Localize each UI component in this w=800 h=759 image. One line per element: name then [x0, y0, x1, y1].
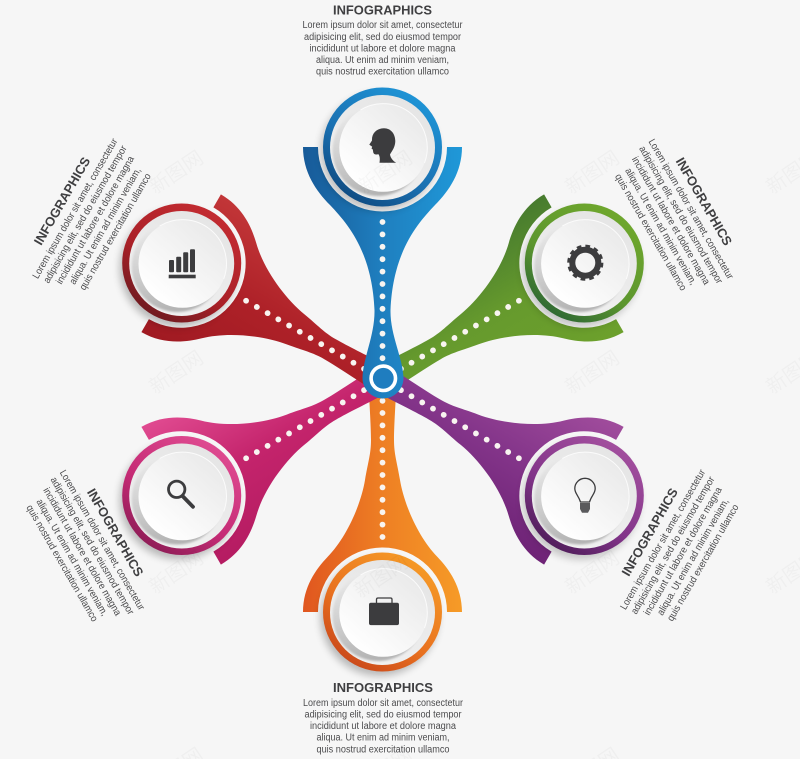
purple petal — [342, 310, 644, 565]
blue petal — [303, 88, 462, 398]
text block: bottom: adipisicing elit, sed do eiusmod tempor — [304, 710, 462, 721]
text block: bottom — [303, 680, 464, 755]
watermark stamps: 新图网 — [561, 146, 624, 199]
text block: red: aliqua. Ut enim ad minim veniam, — [68, 166, 144, 287]
red arm — [141, 194, 423, 449]
icon: briefcase — [369, 598, 399, 625]
icon: gear — [569, 246, 602, 279]
text block: purple: incididunt ut labore et dolore magna — [642, 485, 725, 617]
text block: red: incididunt ut labore et dolore magna — [54, 154, 137, 286]
text block: purple: INFOGRAPHICS — [618, 485, 681, 579]
text block: bottom: quis nostrud exercitation ullamco — [316, 744, 450, 755]
red arm dots — [242, 297, 368, 373]
watermark stamps: 新图网 — [561, 546, 624, 599]
blue ring — [320, 88, 442, 211]
orange ring — [320, 552, 442, 676]
watermark stamps: 新图网 — [145, 346, 208, 399]
green arm — [342, 194, 624, 449]
pink ring — [120, 436, 241, 560]
text block: pink: aliqua. Ut enim ad minim veniam, — [34, 497, 110, 618]
green arm dots — [397, 297, 523, 373]
text block: top: incididunt ut labore et dolore magna — [310, 43, 456, 54]
text block: purple: aliqua. Ut enim ad minim veniam, — [655, 497, 731, 618]
text block: bottom: INFOGRAPHICS — [333, 680, 433, 695]
red ring — [120, 204, 241, 327]
watermark stamps: 新图网 — [561, 346, 624, 399]
blue arm — [303, 147, 462, 398]
icon: magnifier — [168, 481, 193, 507]
text block: pink: incididunt ut labore et dolore magna — [40, 486, 123, 618]
text block: purple: Lorem ipsum dolor sit amet, consectetur — [619, 467, 708, 612]
text block: bottom: Lorem ipsum dolor sit amet, consectetur — [303, 698, 464, 709]
blue arm dots — [380, 219, 385, 361]
text block: pink: adipisicing elit, sed do eiusmod tempor — [48, 475, 136, 617]
text block: red — [16, 127, 161, 304]
text block: green: aliqua. Ut enim ad minim veniam, — [622, 166, 698, 287]
watermark stamps: 新图网 — [354, 146, 417, 199]
icon: light bulb — [575, 478, 595, 513]
green petal — [342, 194, 644, 449]
text block: green: adipisicing elit, sed do eiusmod tempor — [636, 144, 725, 286]
watermark stamps: 新图网 — [350, 550, 413, 603]
text block: green: quis nostrud exercitation ullamco — [612, 172, 688, 293]
purple arm — [342, 310, 624, 565]
green ring — [522, 204, 644, 327]
text block: purple — [603, 458, 749, 635]
text block: top: quis nostrud exercitation ullamco — [316, 67, 449, 78]
watermark stamps — [145, 146, 800, 759]
centre knob — [371, 366, 395, 390]
text block: top — [302, 2, 463, 78]
text block: green: INFOGRAPHICS — [673, 155, 735, 248]
text block: green: incididunt ut labore et dolore magna — [629, 155, 712, 287]
text block: pink — [17, 459, 162, 636]
text block: red: INFOGRAPHICS — [31, 154, 93, 248]
pink arm — [141, 310, 423, 565]
text block: green: Lorem ipsum dolor sit amet, consectetur — [646, 137, 735, 282]
text block: top: adipisicing elit, sed do eiusmod tempor — [304, 32, 462, 43]
text block: top: INFOGRAPHICS — [333, 2, 432, 18]
text block: top: aliqua. Ut enim ad minim veniam, — [316, 55, 449, 66]
text block: green — [605, 128, 751, 305]
text block: purple: quis nostrud exercitation ullamco — [665, 502, 742, 623]
text block: purple: adipisicing elit, sed do eiusmod tempor — [629, 474, 718, 616]
text block: top: Lorem ipsum dolor sit amet, consectetur — [302, 20, 463, 31]
orange arm — [303, 379, 462, 612]
purple ring — [522, 436, 644, 560]
text block: red: adipisicing elit, sed do eiusmod tempor — [42, 143, 130, 285]
pink petal — [120, 310, 423, 565]
icon: bar chart — [169, 249, 196, 278]
text block: bottom: incididunt ut labore et dolore magna — [310, 721, 456, 732]
text block: pink: Lorem ipsum dolor sit amet, consectetur — [57, 468, 147, 613]
pink arm dots — [242, 386, 368, 462]
text block: red: Lorem ipsum dolor sit amet, consectetur — [31, 136, 121, 281]
text block: bottom: aliqua. Ut enim ad minim veniam, — [316, 733, 450, 744]
text block: pink: quis nostrud exercitation ullamco — [23, 503, 100, 624]
text block: pink: INFOGRAPHICS — [84, 486, 147, 579]
orange petal — [303, 379, 462, 676]
orange arm dots — [380, 398, 385, 540]
red petal — [120, 194, 423, 449]
watermark stamps: 新图网 — [145, 146, 208, 199]
text block: red: quis nostrud exercitation ullamco — [78, 171, 154, 292]
icon: head silhouette — [369, 128, 396, 163]
purple arm dots — [397, 386, 523, 462]
watermark stamps: 新图网 — [145, 546, 208, 599]
